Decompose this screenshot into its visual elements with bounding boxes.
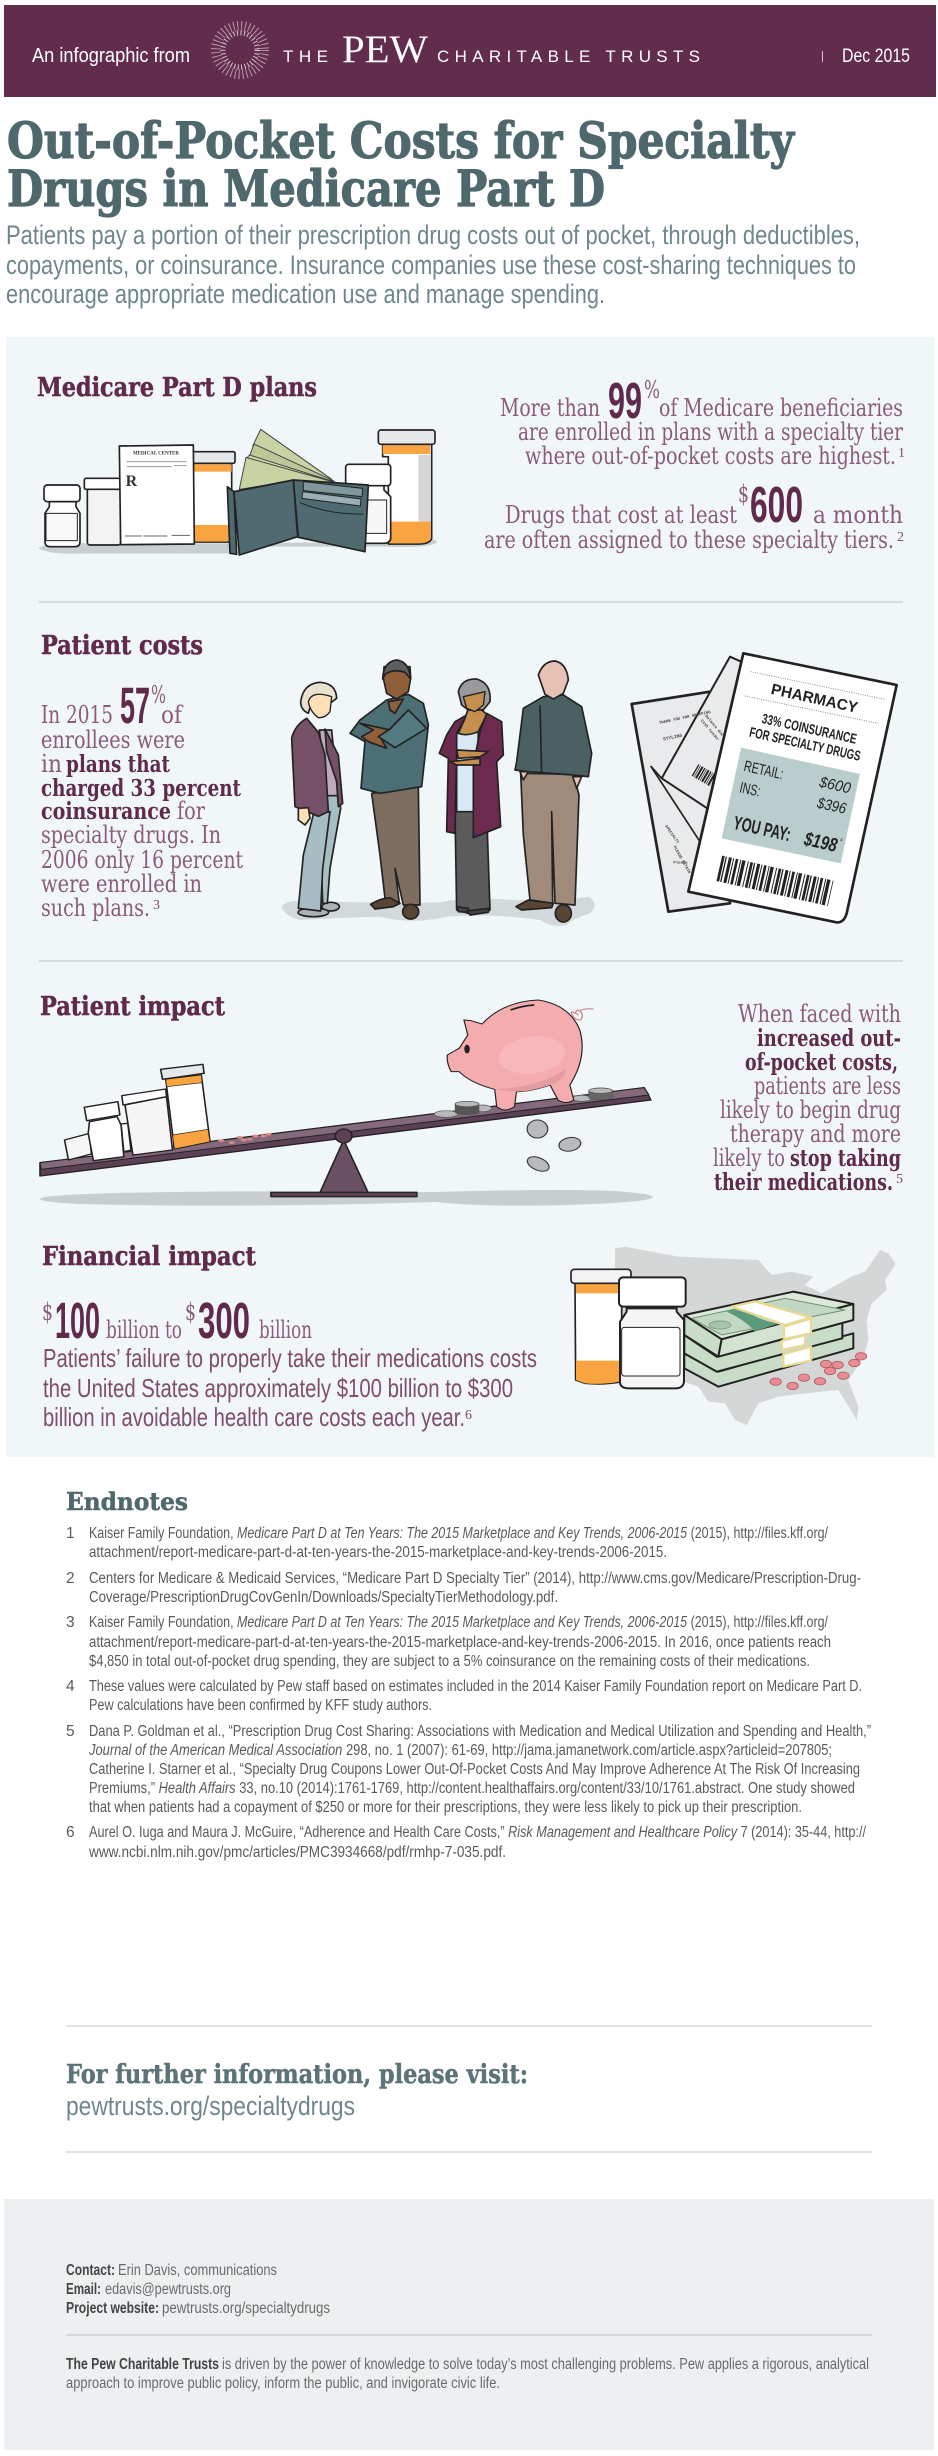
stat: 100 to 300 billion: billion <box>259 1316 312 1344</box>
small bottle <box>84 1102 131 1161</box>
contact details: Contact: <box>66 2262 115 2279</box>
logo wordmark: THE <box>283 47 328 66</box>
prescription pad: MEDICAL CENTER <box>133 452 179 457</box>
receipt text: INS: <box>738 779 762 800</box>
endnote 1 <box>66 1525 829 1561</box>
logo wordmark <box>283 28 700 71</box>
orange bottle behind paper <box>190 452 235 542</box>
contact details <box>66 2262 330 2317</box>
endnote 4 <box>66 1678 862 1714</box>
heading: Endnotes: Endnotes <box>66 1487 188 1516</box>
small receipt print: PLEASE RETAIN <box>672 846 691 875</box>
endnote 4: 4 <box>66 1678 75 1695</box>
receipt text: $600 <box>817 774 853 797</box>
endnote 5: that when patients had a copayment of $250 or more for their prescriptions, they were less likely to pick up their prescription. <box>89 1799 802 1816</box>
small receipt print: Cash tender <box>699 719 720 743</box>
receipt text: RETAIL: <box>742 758 785 783</box>
small receipt print: THANK YOU FOR SHOPPING <box>659 711 712 726</box>
person: older woman in mauve cardigan <box>292 682 343 917</box>
stat: 100 to 300 billion: billion to <box>106 1316 182 1344</box>
text block: 57 percent of enrollees: plans that <box>66 751 170 778</box>
header label: An infographic from: An infographic from <box>32 45 190 67</box>
endnotes list <box>66 1525 871 1861</box>
endnote 6: 6 <box>66 1824 75 1841</box>
receipt text: 4 <box>840 837 844 843</box>
header date: Dec 2015 <box>842 46 910 67</box>
about Pew statement: approach to improve public policy, inform the public, and invigorate civic life. <box>66 2375 500 2392</box>
stat: 600 dollars a month: $ <box>738 480 749 508</box>
logo wordmark: CHARITABLE TRUSTS <box>437 47 700 66</box>
contact details: pewtrusts.org/specialtydrugs <box>162 2300 330 2317</box>
small receipt print: STYLING <box>663 733 683 743</box>
endnote 5: 5 <box>66 1723 75 1740</box>
title <box>7 111 796 218</box>
white bottle <box>619 1277 686 1388</box>
endnote 6: www.ncbi.nlm.nih.gov/pmc/articles/PMC3934668/pdf/rmhp-7-035.pdf. <box>88 1844 506 1861</box>
heading: Patient costs: Patient costs <box>41 631 203 661</box>
subtitle intro text <box>6 220 860 309</box>
endnote 6: Aurel O. Iuga and Maura J. McGuire, “Adherence and Health Care Costs,” Risk Management and Healthcare Policy 7 (2014): 35-44, http:// <box>89 1824 867 1841</box>
receipt text: $396 <box>815 795 848 818</box>
contact details: Email: <box>66 2281 101 2298</box>
person: bald man in dark jacket <box>515 661 592 922</box>
coins on plank <box>434 1088 613 1117</box>
stat: 600 dollars a month: 600 <box>750 476 803 533</box>
panel: main light-blue background <box>6 337 934 1457</box>
panel: footer <box>4 2199 934 2450</box>
tall orange bottle <box>378 430 435 544</box>
back receipt <box>632 692 730 912</box>
further information callout: For further information, please visit: <box>66 2060 528 2090</box>
map silhouette <box>615 1247 896 1425</box>
subtitle intro text: encourage appropriate medication use and manage spending. <box>6 279 605 309</box>
plank <box>40 1088 651 1176</box>
header banner <box>4 5 936 97</box>
paper box <box>65 1133 91 1160</box>
about Pew statement: The Pew Charitable Trusts <box>66 2356 219 2373</box>
endnote 6 <box>66 1824 867 1861</box>
text block: patient impact: increased out- <box>757 1025 901 1052</box>
contact details: edavis@pewtrusts.org <box>105 2281 231 2298</box>
receipt text: YOU PAY: <box>731 813 793 846</box>
endnote 3: Kaiser Family Foundation, Medicare Part D at Ten Years: The 2015 Marketplace and Key Trends, 2006-2015 (2015), http://files.kff.org/ <box>89 1614 829 1631</box>
person: woman in burgundy cardigan <box>439 679 503 915</box>
text block: avoidable health care costs: the United States approximately $100 billion to $300 <box>43 1373 513 1403</box>
receipt total panel <box>722 748 860 863</box>
pills <box>218 1133 272 1144</box>
illustration: bottles, prescription and wallet <box>38 429 437 555</box>
stat: 99 percent enrolled: More than <box>500 394 600 422</box>
stat: 600 dollars a month: a month <box>813 501 903 529</box>
stat: 99 percent enrolled: 99 <box>608 372 642 429</box>
stat: 100 to 300 billion <box>42 1292 312 1349</box>
heading: Financial impact: Financial impact <box>42 1242 256 1272</box>
stat: 100 to 300 billion: $ <box>42 1298 53 1326</box>
money fan <box>239 429 338 489</box>
prescription pad <box>119 445 194 545</box>
endnote 1: Kaiser Family Foundation, Medicare Part D at Ten Years: The 2015 Marketplace and Key Trends, 2006-2015 (2015), http://files.kff.org/ <box>89 1525 829 1542</box>
illustration: seesaw with medication and piggy bank <box>40 1000 653 1206</box>
text block: 57 percent of enrollees: charged 33 percent <box>41 775 241 802</box>
cash stacks <box>684 1292 853 1387</box>
text block: patient impact: likely to <box>713 1144 785 1172</box>
text block: avoidable health care costs: 6 <box>465 1408 472 1423</box>
title: Drugs in Medicare Part D <box>7 159 605 218</box>
text block: 57 percent of enrollees: 57 <box>120 677 150 734</box>
stat: 600 dollars a month <box>484 476 904 554</box>
main receipt <box>688 653 897 922</box>
receipt text: PHARMACY <box>769 681 859 717</box>
falling coins <box>524 1120 583 1174</box>
stat: 600 dollars a month: 2 <box>897 530 904 545</box>
white jar <box>84 478 123 545</box>
about Pew statement <box>66 2356 869 2392</box>
small receipt print: Balance due <box>703 714 725 738</box>
text block: 57 percent of enrollees: 3 <box>153 898 160 913</box>
receipt text: FOR SPECIALTY DRUGS <box>748 724 862 764</box>
receipt text: 33% COINSURANCE <box>760 710 858 747</box>
orange bottle <box>161 1064 210 1149</box>
contact details: Project website: <box>66 2300 159 2317</box>
logo wordmark: PEW <box>342 28 428 71</box>
middle receipt <box>662 657 745 823</box>
wallet <box>227 480 368 555</box>
barcode <box>719 868 831 893</box>
text block: 57 percent of enrollees: such plans. <box>41 894 150 922</box>
pills <box>770 1353 867 1390</box>
text block: 57 percent of enrollees: for <box>177 797 205 825</box>
stat: 99 percent enrolled <box>500 372 905 470</box>
small receipt print: SPECIALTY <box>663 825 679 845</box>
text block: avoidable health care costs: billion in avoidable health care costs each year. <box>43 1402 465 1432</box>
endnote 1: 1 <box>66 1525 75 1542</box>
stat: 99 percent enrolled: 1 <box>898 446 905 461</box>
text block: patient impact: When faced with <box>738 1000 901 1028</box>
heading: Patient impact: Patient impact <box>40 992 225 1022</box>
endnote 2 <box>66 1570 861 1606</box>
fulcrum <box>271 1140 417 1197</box>
person: man with crossed arms <box>350 660 428 919</box>
receipt text: $198 <box>801 829 839 857</box>
stat: 100 to 300 billion: $ <box>185 1298 196 1326</box>
illustration: four patients <box>282 660 595 926</box>
endnote 1: attachment/report-medicare-part-d-at-ten-years-the-2015-marketplace-and-key-trends-2006-2015. <box>89 1544 667 1561</box>
endnote 2: 2 <box>66 1570 75 1587</box>
small white bottle behind wallet <box>346 464 391 543</box>
text block: 57 percent of enrollees <box>41 677 243 922</box>
jar <box>122 1089 172 1155</box>
text block: 57 percent of enrollees: 2006 only 16 percent <box>41 846 243 874</box>
endnote 3: attachment/report-medicare-part-d-at-ten-years-the-2015-marketplace-and-key-trends-2006-2015. In 2016, once patients reach <box>89 1634 831 1651</box>
text block: patient impact: 5 <box>896 1172 903 1187</box>
text block: patient impact: stop taking <box>790 1145 901 1172</box>
text block: 57 percent of enrollees: were enrolled in <box>41 870 202 898</box>
text block: 57 percent of enrollees: of <box>161 701 184 729</box>
piggy bank <box>447 1000 594 1110</box>
stat: 600 dollars a month: Drugs that cost at least <box>505 501 737 529</box>
contact details: Erin Davis, communications <box>118 2262 277 2279</box>
endnote 3: $4,850 in total out-of-pocket drug spending, they are subject to a 5% coinsurance on the remaining costs of their medications. <box>89 1653 810 1670</box>
small receipt print: Please <box>673 860 688 865</box>
orange bottle <box>571 1269 631 1384</box>
prescription pad: R <box>126 473 138 490</box>
text block: 57 percent of enrollees: % <box>151 681 166 709</box>
cash bands <box>732 1301 811 1367</box>
text block: avoidable health care costs <box>43 1343 537 1432</box>
text block: patient impact <box>713 1000 903 1196</box>
stat: 99 percent enrolled: % <box>644 376 660 404</box>
icon: Pew sunburst logo <box>216 26 264 74</box>
header date <box>822 46 910 67</box>
text block: 57 percent of enrollees: coinsurance <box>41 798 171 825</box>
endnote 2: Coverage/PrescriptionDrugCovGenIn/Downloads/SpecialtyTierMethodology.pdf. <box>89 1589 558 1606</box>
further information callout: pewtrusts.org/specialtydrugs <box>66 2091 355 2121</box>
title: Out-of-Pocket Costs for Specialty <box>7 111 796 170</box>
text block: avoidable health care costs: Patients’ failure to properly take their medications costs <box>43 1343 537 1373</box>
small white bottle <box>44 485 80 547</box>
fulcrum pivot <box>335 1129 352 1143</box>
illustration: pharmacy receipts <box>632 653 897 922</box>
endnote 5: Journal of the American Medical Association 298, no. 1 (2007): 61-69, http://jama.jamanetwork.com/article.aspx?articleid=207805; <box>88 1742 832 1759</box>
text block: 57 percent of enrollees: in <box>41 750 62 778</box>
heading: Medicare Part D plans: Medicare Part D plans <box>37 373 317 403</box>
endnote 3: 3 <box>66 1614 75 1631</box>
further information callout <box>66 2060 528 2121</box>
endnote 4: Pew calculations have been confirmed by KFF study authors. <box>89 1697 432 1714</box>
small receipt print <box>659 711 725 875</box>
endnote 5 <box>66 1723 871 1816</box>
text block: 57 percent of enrollees: enrollees were <box>41 726 185 754</box>
endnote 3 <box>66 1614 831 1670</box>
stat: 100 to 300 billion: 300 <box>198 1292 250 1349</box>
floor shadow <box>40 1190 653 1206</box>
stat: 100 to 300 billion: 100 <box>55 1292 100 1349</box>
text block: 57 percent of enrollees: specialty drugs. In <box>41 821 221 849</box>
receipt text <box>731 681 862 857</box>
text block: 57 percent of enrollees: In 2015 <box>41 701 113 729</box>
illustration: US map with bottles, cash and pills <box>571 1247 896 1425</box>
